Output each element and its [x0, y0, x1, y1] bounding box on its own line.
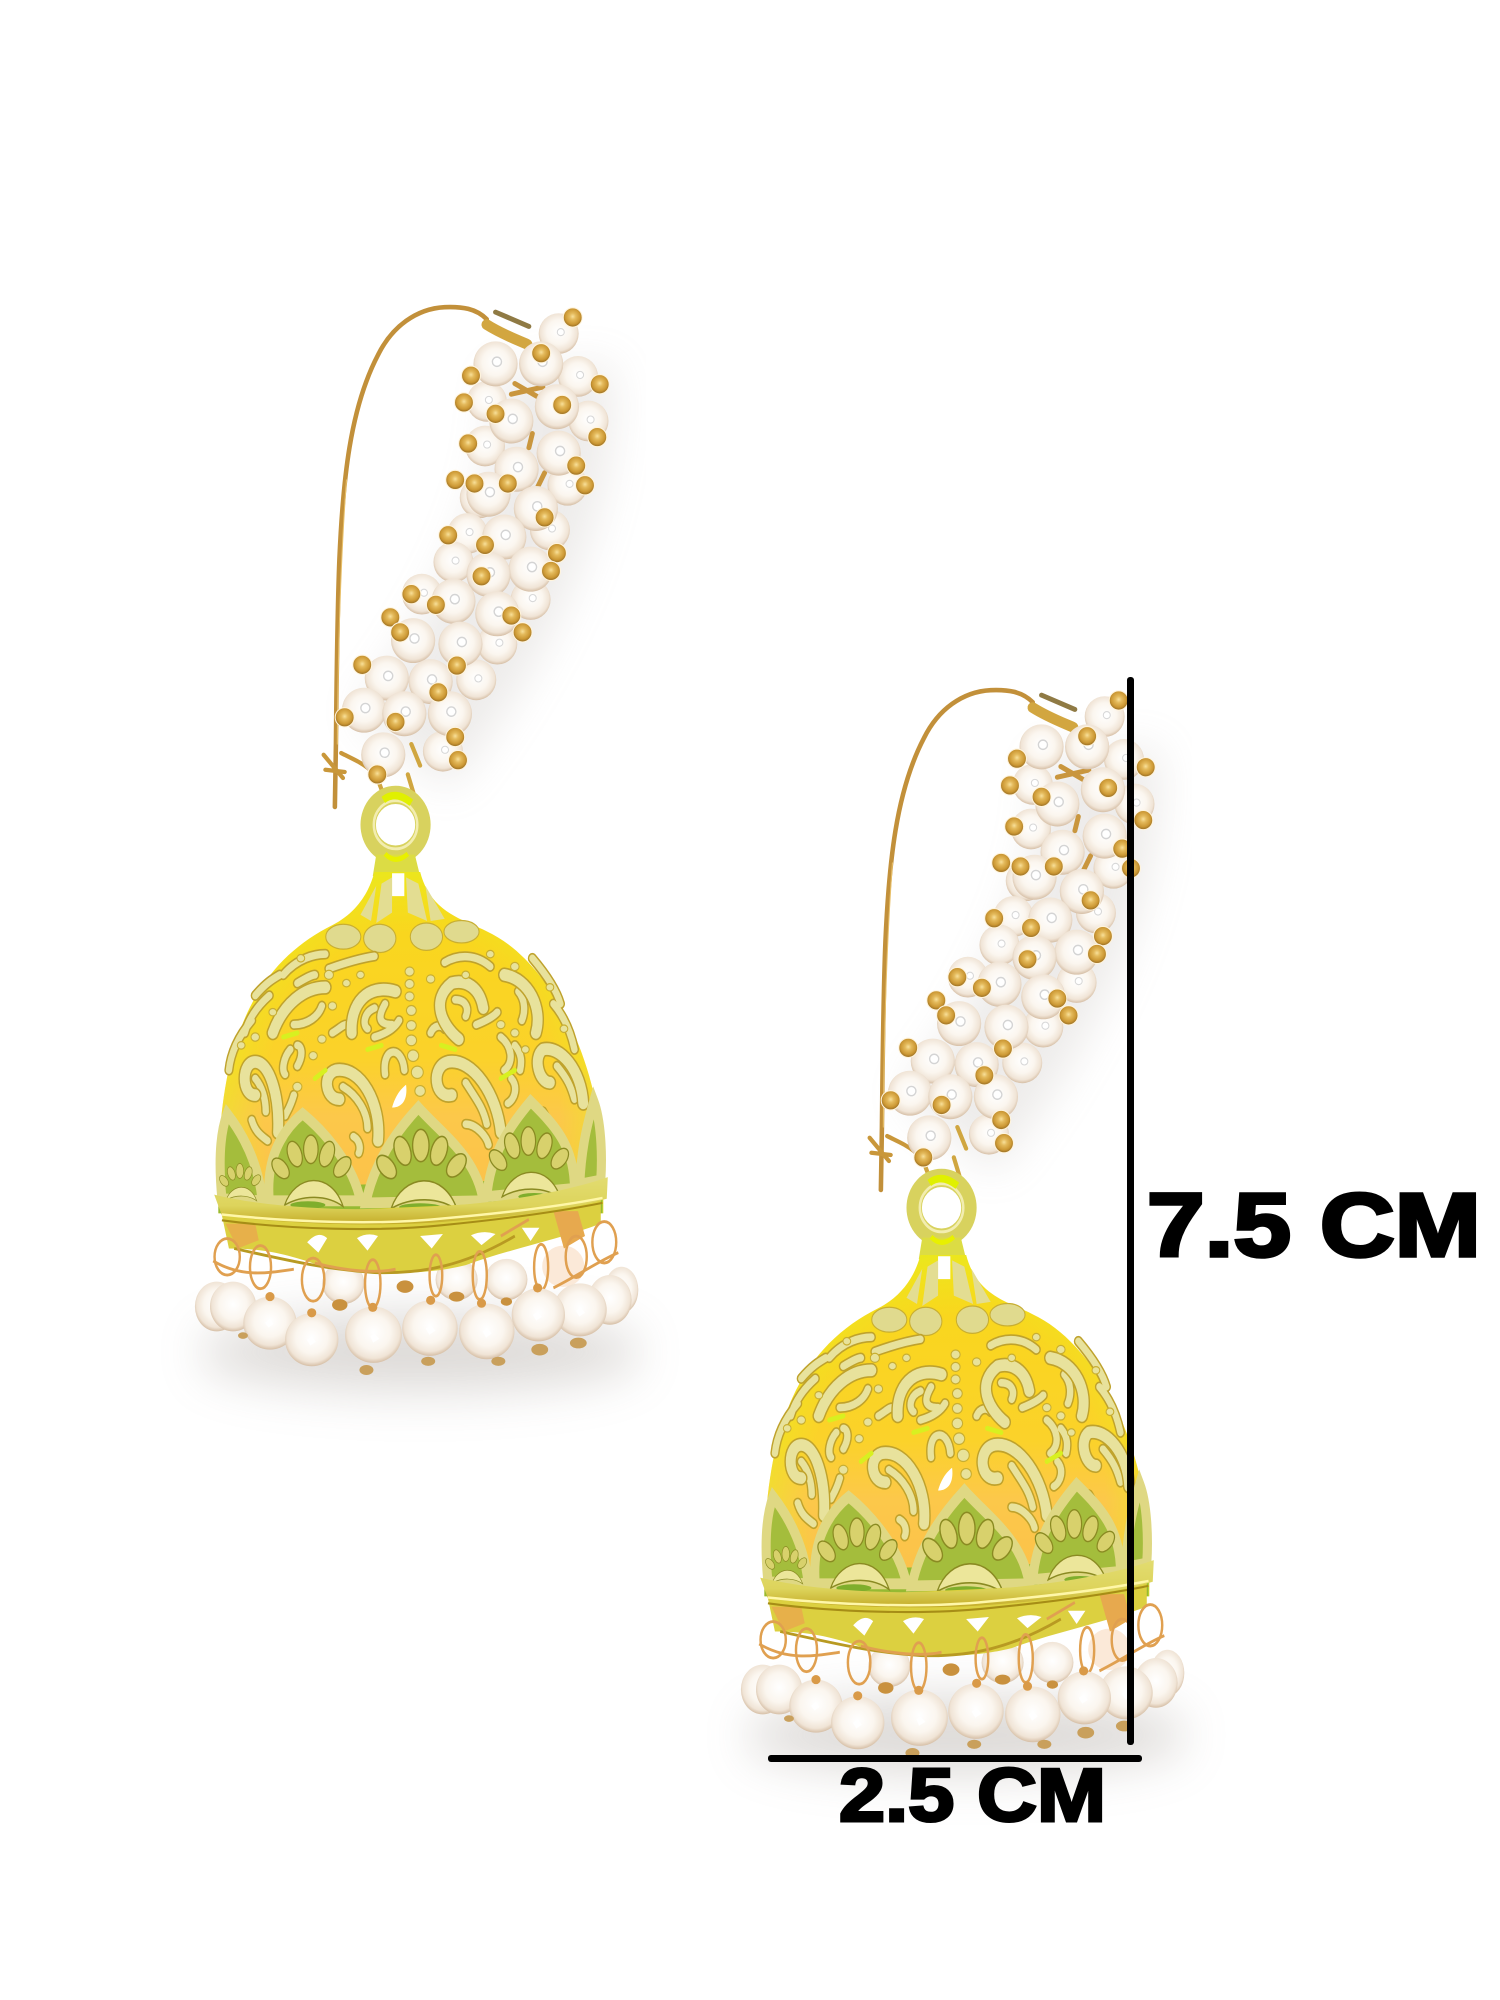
left jhumka bell [195, 795, 645, 1389]
left hook with pearl cluster [324, 307, 609, 807]
gold wire hook [324, 307, 545, 807]
left earring [195, 307, 645, 1389]
height dimension line [1127, 677, 1134, 1745]
gold lattice fringe [222, 1199, 601, 1273]
front drop pearls [210, 1282, 607, 1375]
back pearls [195, 1246, 638, 1331]
right earring [741, 690, 1191, 1772]
width label: 2.5 CM: 2.5 CM [839, 1753, 1106, 1837]
enamel dome [218, 872, 603, 1213]
cluster shadow [403, 369, 554, 751]
pearl cluster [342, 313, 608, 777]
pendant loop [368, 795, 423, 876]
height label: 7.5 CM: 7.5 CM [1147, 1176, 1481, 1276]
right jhumka bell [741, 1178, 1191, 1772]
width dimension line [768, 1755, 1142, 1762]
metal band [214, 1177, 608, 1229]
green arches [218, 1101, 603, 1213]
gold beads [335, 308, 609, 784]
orange wire links [213, 1219, 618, 1308]
bell shadow [196, 1315, 645, 1389]
right hook with pearl cluster [870, 690, 1155, 1190]
